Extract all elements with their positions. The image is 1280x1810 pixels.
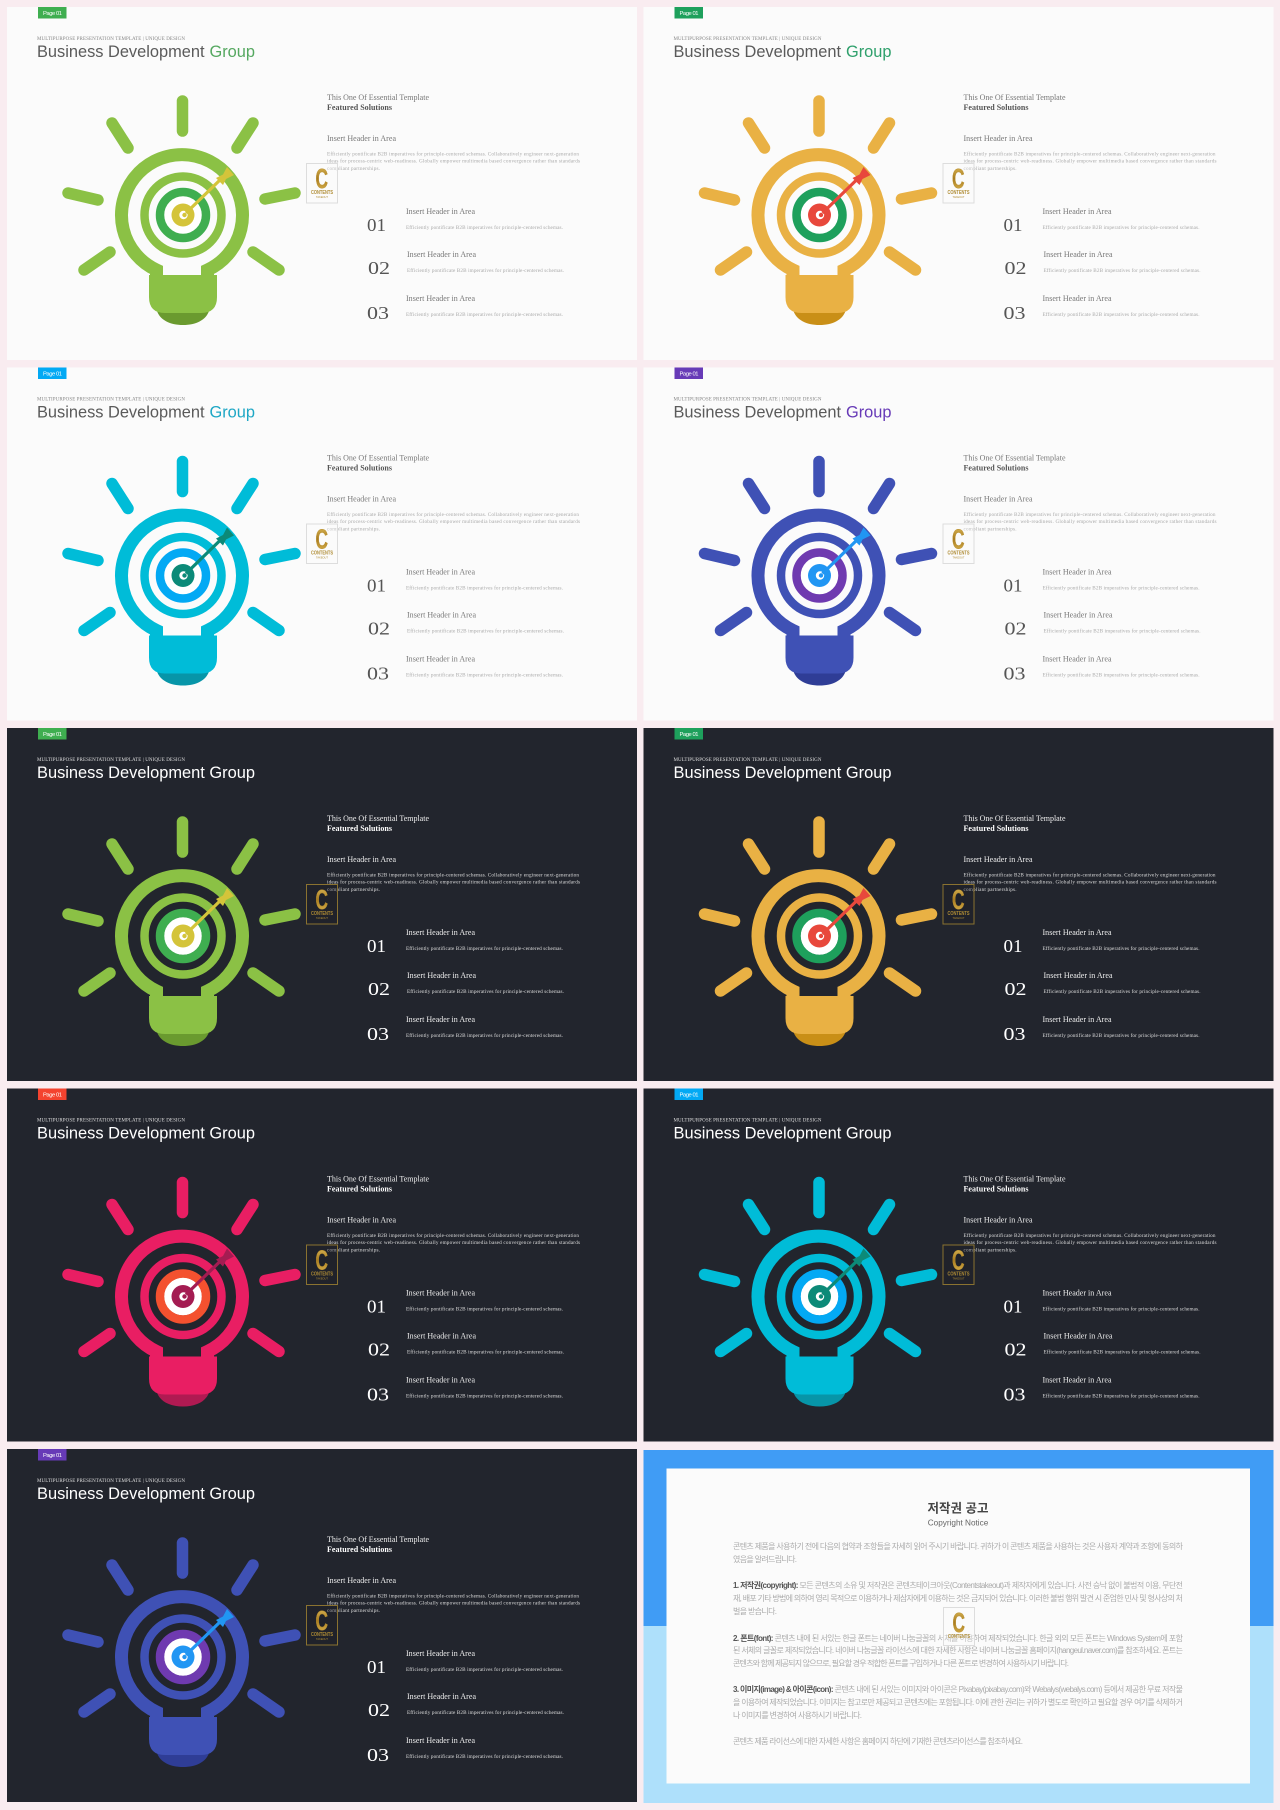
watermark badge [943,524,974,564]
copyright title: 저작권 공고 [928,1500,988,1516]
text block: featured solutions: This One Of Essential Template [327,1535,429,1544]
numbered list: 01 [1004,576,1022,596]
numbered list: 02 [1004,1340,1026,1360]
heading: Group [210,402,255,422]
panel: cyan dark slide [644,1088,1274,1442]
numbered list: Insert Header in Area [407,1332,476,1340]
text block: featured solutions: Insert Header in Area [327,1576,396,1585]
numbered list [367,568,564,684]
watermark badge: CONTENTS [311,911,333,917]
numbered list: 02 [368,258,390,278]
text block: featured solutions [964,814,1216,893]
numbered list: Efficiently pontificate B2B imperatives for principle-centered schemas. [1042,584,1200,592]
text block: featured solutions: ideas for process-centric web-readiness. Globally empower multimedia based convergence rather than standards [327,879,580,886]
numbered list: Efficiently pontificate B2B imperatives for principle-centered schemas. [407,267,564,274]
numbered list [1004,1288,1200,1404]
copyright title [928,1500,989,1528]
text block: featured solutions: Featured Solutions [964,103,1028,112]
panel: blue light slide [644,368,1274,720]
heading [674,398,892,422]
watermark badge: TAKEOUT [316,1637,328,1641]
watermark badge: C [952,163,964,194]
watermark badge: TAKEOUT [952,1276,965,1280]
text block: featured solutions: compliant partnerships. [327,1248,380,1254]
text block: featured solutions: Insert Header in Area [964,134,1033,143]
text block: featured solutions [964,1174,1216,1254]
page tag [38,7,66,18]
panel: pink dark slide [7,1088,637,1442]
numbered list: Efficiently pontificate B2B imperatives for principle-centered schemas. [406,311,563,318]
numbered list: Insert Header in Area [406,1649,475,1658]
numbered list: Insert Header in Area [1044,610,1113,620]
text block: featured solutions [327,1535,580,1614]
numbered list: Efficiently pontificate B2B imperatives for principle-centered schemas. [1042,672,1200,678]
copyright intro: 였음을 알려드립니다. [733,1554,797,1564]
page tag: Page 01 [680,1092,698,1098]
icon: light bulb with target [704,462,932,686]
numbered list: 02 [368,1700,390,1720]
numbered list: Efficiently pontificate B2B imperatives for principle-centered schemas. [406,1392,563,1400]
watermark badge [306,884,338,924]
numbered list: 02 [1004,979,1026,999]
text block: featured solutions: Efficiently pontificate B2B imperatives for principle-centered schemas. Collaboratively engineer next-generation [327,151,579,158]
numbered list: 01 [367,936,386,956]
heading: Group [846,402,892,422]
text block: featured solutions: compliant partnerships. [964,526,1016,532]
copyright clause 1: 재, 배포 기타 방법에 의하여 영리 목적으로 이용하거나 제삼자에게 이용하는 것은 금지되어 있습니다. 이러한 불법 행위 발견 시 준엄한 민사 및 형사상의 처 [733,1593,1183,1603]
text block: featured solutions: Insert Header in Area [327,1216,396,1224]
page tag [674,368,703,379]
watermark badge: CONTENTS [948,1272,970,1278]
watermark badge: TAKEOUT [316,1276,328,1280]
page tag: Page 01 [680,11,698,17]
watermark badge: CONTENTS [948,550,970,556]
numbered list: 02 [1004,618,1026,638]
numbered list: Efficiently pontificate B2B imperatives for principle-centered schemas. [406,672,563,678]
numbered list: 03 [367,303,389,323]
numbered list: Efficiently pontificate B2B imperatives for principle-centered schemas. [406,1666,563,1673]
page tag: Page 01 [43,11,62,17]
heading: MULTIPURPOSE PRESENTATION TEMPLATE | UNIQUE DESIGN [674,37,822,42]
page tag [38,368,66,379]
icon: light bulb with target [704,822,932,1046]
watermark badge [943,1244,974,1284]
heading: Business Development Group [37,763,255,782]
numbered list: Insert Header in Area [407,610,476,620]
numbered list: Insert Header in Area [1042,1288,1112,1298]
numbered list: Insert Header in Area [406,294,475,303]
copyright clause 3: 나 이미지를 변경하여 사용하시기 바랍니다. [733,1710,862,1720]
heading: MULTIPURPOSE PRESENTATION TEMPLATE | UNIQUE DESIGN [674,1118,822,1124]
copyright intro [733,1541,1184,1564]
heading: Business Development Group [674,1124,892,1142]
numbered list: Efficiently pontificate B2B imperatives for principle-centered schemas. [1044,267,1200,274]
page tag [674,7,703,18]
copyright clause 1 [733,1580,1183,1616]
heading: MULTIPURPOSE PRESENTATION TEMPLATE | UNIQUE DESIGN [37,1479,185,1484]
numbered list [367,928,564,1044]
watermark badge [306,1605,338,1645]
numbered list: Insert Header in Area [1042,568,1112,576]
page tag [674,1088,703,1100]
watermark badge: CONTENTS [948,911,970,917]
heading: Business Development [37,42,205,61]
page tag: Page 01 [43,372,62,378]
page tag: Page 01 [43,732,62,738]
text block: featured solutions: Efficiently pontificate B2B imperatives for principle-centered schemas. Collaboratively engineer next-generation [964,511,1216,518]
numbered list: Insert Header in Area [406,207,475,216]
text block: featured solutions: Insert Header in Area [964,855,1033,864]
watermark badge: CONTENTS [311,190,333,196]
text block: featured solutions: This One Of Essential Template [327,454,429,462]
text block: featured solutions: Efficiently pontificate B2B imperatives for principle-centered schemas. Collaboratively engineer next-generation [964,151,1216,158]
copyright clause 3: 을 이용하여 제작되었습니다. 이미지는 참고로만 제공되고 콘텐츠에는 포함됩니다. 이에 관한 권리는 귀하가 별도로 확인하고 필요할 경우 여기를 삭제하거 [733,1697,1183,1707]
icon: light bulb with target [68,1182,295,1406]
numbered list: Insert Header in Area [1042,1376,1112,1384]
numbered list: Insert Header in Area [1044,1332,1113,1340]
panel: green light slide [7,7,637,360]
watermark badge [944,1607,974,1646]
text block: featured solutions: Efficiently pontificate B2B imperatives for principle-centered schemas. Collaboratively engineer next-generation [327,511,579,518]
numbered list: Efficiently pontificate B2B imperatives for principle-centered schemas. [406,584,563,592]
text block: featured solutions: compliant partnerships. [327,1608,380,1614]
text block: featured solutions: compliant partnerships. [327,887,380,893]
icon: light bulb with target [68,101,295,325]
watermark badge: C [316,1244,328,1276]
copyright footer: 콘텐츠 제품 라이선스에 대한 자세한 사항은 홈페이지 하단에 기재한 콘텐츠라이선스를 참조하세요. [733,1736,1023,1746]
text block: featured solutions [327,814,580,893]
numbered list: 01 [1004,1296,1022,1316]
text block: featured solutions [327,1174,580,1254]
numbered list: Insert Header in Area [1042,294,1112,303]
copyright clause 3 [733,1684,1183,1720]
text block: featured solutions: Featured Solutions [327,103,392,112]
numbered list: Insert Header in Area [406,568,475,576]
numbered list: Insert Header in Area [406,654,475,664]
icon: light bulb with target [68,822,295,1046]
text block: featured solutions: Insert Header in Area [327,494,396,504]
watermark badge: TAKEOUT [316,195,328,199]
heading: MULTIPURPOSE PRESENTATION TEMPLATE | UNIQUE DESIGN [37,1118,185,1124]
numbered list: Insert Header in Area [1044,971,1113,980]
heading [37,398,255,422]
watermark badge: C [316,524,328,554]
numbered list [367,1649,564,1765]
watermark badge: TAKEOUT [952,195,965,199]
numbered list [367,1288,564,1404]
panel: yellow dark slide [644,728,1274,1081]
text block: featured solutions: Featured Solutions [327,824,392,833]
text block: featured solutions: ideas for process-centric web-readiness. Globally empower multimedia based convergence rather than standards [964,518,1216,525]
watermark badge [943,884,974,924]
text block: featured solutions: Efficiently pontificate B2B imperatives for principle-centered schemas. Collaboratively engineer next-generation [327,1232,579,1239]
text block: featured solutions: This One Of Essential Template [327,93,429,102]
text block: featured solutions: ideas for process-centric web-readiness. Globally empower multimedia based convergence rather than standards [327,158,580,165]
numbered list: Efficiently pontificate B2B imperatives for principle-centered schemas. [406,1753,563,1760]
heading: Business Development [674,402,841,422]
text block: featured solutions: This One Of Essential Template [964,1174,1066,1184]
numbered list: Insert Header in Area [406,1376,475,1384]
copyright clause 2: 된 서체의 글꼴로 제작되었습니다. 네이버 나눔글꼴 라이선스에 대한 자세한 사항은 네이버 나눔글꼴 홈페이지(hangeul.naver.com)를 참조하세요. 폰트는 [733,1645,1183,1655]
numbered list: 02 [368,979,390,999]
numbered list: Insert Header in Area [1042,928,1112,937]
numbered list: 03 [367,1384,389,1404]
text block: featured solutions: This One Of Essential Template [964,93,1066,102]
numbered list [367,207,564,323]
numbered list: 02 [1004,258,1026,278]
numbered list: Efficiently pontificate B2B imperatives for principle-centered schemas. [1044,988,1200,995]
page tag [38,1088,66,1100]
watermark badge: CONTENTS [311,1272,333,1278]
watermark badge: CONTENTS [948,190,970,196]
numbered list: Efficiently pontificate B2B imperatives for principle-centered schemas. [1042,1306,1200,1312]
numbered list: Efficiently pontificate B2B imperatives for principle-centered schemas. [406,1306,563,1312]
icon: light bulb with target [68,462,295,686]
numbered list: 03 [1004,1024,1026,1044]
numbered list: Insert Header in Area [406,1015,475,1024]
text block: featured solutions: ideas for process-centric web-readiness. Globally empower multimedia based convergence rather than standards [327,1239,580,1246]
watermark badge: C [952,1607,965,1638]
text block: featured solutions [327,454,580,532]
text block: featured solutions: ideas for process-centric web-readiness. Globally empower multimedia based convergence rather than standards [964,879,1216,886]
text block: featured solutions: compliant partnerships. [327,526,380,532]
heading: Business Development [674,42,841,61]
icon: light bulb with target [704,101,932,325]
text block: featured solutions: ideas for process-centric web-readiness. Globally empower multimedia based convergence rather than standards [964,158,1216,165]
numbered list: Insert Header in Area [1042,207,1112,216]
numbered list: Efficiently pontificate B2B imperatives for principle-centered schemas. [1042,1392,1200,1400]
numbered list: Insert Header in Area [406,1288,475,1298]
text block: featured solutions: Insert Header in Area [327,855,396,864]
numbered list: Insert Header in Area [1044,250,1113,259]
numbered list: Efficiently pontificate B2B imperatives for principle-centered schemas. [1042,224,1200,231]
numbered list: 01 [367,1657,386,1677]
copyright clause 1: 벌을 받습니다. [733,1606,777,1616]
copyright clause 2: 콘텐츠와 함께 제공되지 않으므로, 필요할 경우 적합한 폰트를 구입하거나 다른 폰트로 변경하여 사용하시기 바랍니다. [733,1658,1069,1668]
numbered list: 02 [368,1340,390,1360]
watermark badge: C [952,524,964,554]
numbered list: 03 [367,664,389,684]
watermark badge: C [316,884,328,915]
copyright clause 1: 1. 저작권(copyright): 모든 콘텐츠의 소유 및 저작권은 콘텐츠테이크아웃(Contentstakeout)과 제작자에게 있습니다. 사전 승낙 없이 불법적 이용, 무단전 [733,1580,1183,1590]
page tag [674,728,703,740]
watermark badge: C [316,163,328,194]
text block: featured solutions: Featured Solutions [964,1184,1028,1194]
numbered list: Efficiently pontificate B2B imperatives for principle-centered schemas. [1042,945,1200,952]
heading: MULTIPURPOSE PRESENTATION TEMPLATE | UNIQUE DESIGN [37,37,185,42]
heading: MULTIPURPOSE PRESENTATION TEMPLATE | UNIQUE DESIGN [37,758,185,763]
numbered list: 03 [1004,303,1026,323]
heading: Business Development [37,402,205,422]
panel: yellow light slide [644,7,1274,360]
copyright intro: 콘텐츠 제품을 사용하기 전에 다음의 협약과 조항들을 자세히 읽어 주시기 바랍니다. 귀하가 이 콘텐츠 제품을 사용하는 것은 사용자 계약과 조항에 동의하 [733,1541,1184,1551]
numbered list: Insert Header in Area [1042,1015,1112,1024]
numbered list: Efficiently pontificate B2B imperatives for principle-centered schemas. [406,1032,563,1039]
numbered list: 03 [1004,1384,1026,1404]
heading [674,37,892,61]
text block: featured solutions: Featured Solutions [964,464,1028,472]
text block: featured solutions: This One Of Essential Template [964,454,1066,462]
numbered list: Efficiently pontificate B2B imperatives for principle-centered schemas. [1042,1032,1200,1039]
watermark badge: C [952,1244,964,1276]
icon: light bulb with target [704,1182,932,1406]
watermark badge: CONTENTS [311,550,333,556]
watermark badge: CONTENTS [948,1634,970,1640]
numbered list: Efficiently pontificate B2B imperatives for principle-centered schemas. [1042,311,1200,318]
numbered list: Efficiently pontificate B2B imperatives for principle-centered schemas. [1044,628,1200,634]
watermark badge [943,163,974,203]
copyright clause 2 [733,1633,1184,1668]
text block: featured solutions: ideas for process-centric web-readiness. Globally empower multimedia based convergence rather than standards [964,1239,1216,1246]
text block: featured solutions: ideas for process-centric web-readiness. Globally empower multimedia based convergence rather than standards [327,1600,580,1607]
heading: Group [846,42,892,61]
numbered list: Efficiently pontificate B2B imperatives for principle-centered schemas. [1044,1348,1200,1356]
numbered list: Insert Header in Area [407,1692,476,1701]
numbered list: 02 [368,618,390,638]
numbered list: 01 [1004,215,1022,235]
text block: featured solutions: compliant partnerships. [964,1248,1016,1254]
watermark badge [306,1244,338,1284]
numbered list: Insert Header in Area [407,971,476,980]
numbered list: Efficiently pontificate B2B imperatives for principle-centered schemas. [407,988,564,995]
heading: Business Development Group [674,763,892,782]
heading [37,37,255,61]
page tag: Page 01 [680,372,698,378]
text block: featured solutions: Featured Solutions [327,464,392,472]
numbered list: Insert Header in Area [406,928,475,937]
watermark badge: TAKEOUT [316,916,328,920]
numbered list: 03 [367,1024,389,1044]
text block: featured solutions: compliant partnerships. [964,887,1016,893]
numbered list: Efficiently pontificate B2B imperatives for principle-centered schemas. [407,1709,564,1716]
numbered list: 01 [367,576,386,596]
text block: featured solutions: Featured Solutions [964,824,1028,833]
copyright clause 3: 3. 이미지(image) & 아이콘(icon): 콘텐츠 내에 된 서있는 이미지와 아이콘은 Pixabay(pixabay.com)와 Webalys(webalys.com) 등에서 제공한 무료 저작물 [733,1684,1183,1694]
watermark badge: TAKEOUT [952,916,965,920]
icon: light bulb with target [68,1543,295,1767]
watermark badge [306,163,338,203]
numbered list: Insert Header in Area [407,250,476,259]
text block: featured solutions: Efficiently pontificate B2B imperatives for principle-centered schemas. Collaboratively engineer next-generation [964,872,1216,879]
heading: Group [210,42,255,61]
panel: cyan light slide [7,368,637,720]
numbered list: 03 [1004,664,1026,684]
text block: featured solutions: This One Of Essential Template [327,814,429,823]
heading: MULTIPURPOSE PRESENTATION TEMPLATE | UNIQUE DESIGN [37,398,185,402]
numbered list: 03 [367,1745,389,1765]
page tag: Page 01 [43,1453,62,1459]
text block: featured solutions: ideas for process-centric web-readiness. Globally empower multimedia based convergence rather than standards [327,518,580,525]
copyright title: Copyright Notice [928,1518,989,1528]
text block: featured solutions: Efficiently pontificate B2B imperatives for principle-centered schemas. Collaboratively engineer next-generation [964,1232,1216,1239]
text block: featured solutions [964,93,1216,172]
text block: featured solutions [964,454,1216,532]
watermark badge: CONTENTS [311,1632,333,1638]
watermark badge: TAKEOUT [316,556,328,560]
numbered list: Efficiently pontificate B2B imperatives for principle-centered schemas. [406,945,563,952]
heading: MULTIPURPOSE PRESENTATION TEMPLATE | UNIQUE DESIGN [674,758,822,763]
numbered list: Efficiently pontificate B2B imperatives for principle-centered schemas. [406,224,563,231]
heading: Business Development Group [37,1484,255,1503]
numbered list [1004,568,1200,684]
numbered list [1004,928,1200,1044]
text block: featured solutions: This One Of Essential Template [327,1174,429,1184]
numbered list: Insert Header in Area [406,1736,475,1745]
watermark badge: TAKEOUT [952,556,965,560]
heading: Business Development Group [37,1124,255,1142]
page tag: Page 01 [43,1092,62,1098]
numbered list: Efficiently pontificate B2B imperatives for principle-centered schemas. [407,1348,564,1356]
text block: featured solutions [327,93,580,172]
numbered list: 01 [367,215,386,235]
heading: MULTIPURPOSE PRESENTATION TEMPLATE | UNIQUE DESIGN [674,398,822,402]
panel: copyright notice [644,1450,1274,1803]
text block: featured solutions: Featured Solutions [327,1545,392,1554]
text block: featured solutions: Efficiently pontificate B2B imperatives for principle-centered schemas. Collaboratively engineer next-generation [327,872,579,879]
text block: featured solutions: This One Of Essential Template [964,814,1066,823]
watermark badge: C [316,1605,328,1636]
text block: featured solutions: compliant partnerships. [327,166,380,172]
copyright clause 2: 2. 폰트(font): 콘텐츠 내에 된 서있는 한글 폰트는 네이버 나눔글꼴의 서체를 이용하여 제작되었습니다. 한글 외의 모든 폰트는 Windows System에 포함 [733,1633,1184,1643]
text block: featured solutions: Insert Header in Area [964,494,1033,504]
text block: featured solutions: compliant partnerships. [964,166,1016,172]
text block: featured solutions: Insert Header in Area [964,1216,1033,1224]
panel: green dark slide [7,728,637,1081]
watermark badge [306,524,338,564]
watermark badge: C [952,884,964,915]
text block: featured solutions: Featured Solutions [327,1184,392,1194]
text block: featured solutions: Efficiently pontificate B2B imperatives for principle-centered schemas. Collaboratively engineer next-generation [327,1593,579,1600]
page tag [38,1449,66,1460]
page tag [38,728,66,740]
numbered list: Insert Header in Area [1042,654,1112,664]
page tag: Page 01 [680,732,698,738]
panel: blue dark slide [7,1449,637,1802]
numbered list: 01 [367,1296,386,1316]
numbered list [1004,207,1200,323]
text block: featured solutions: Insert Header in Area [327,134,396,143]
numbered list: Efficiently pontificate B2B imperatives for principle-centered schemas. [407,628,564,634]
numbered list: 01 [1004,936,1022,956]
